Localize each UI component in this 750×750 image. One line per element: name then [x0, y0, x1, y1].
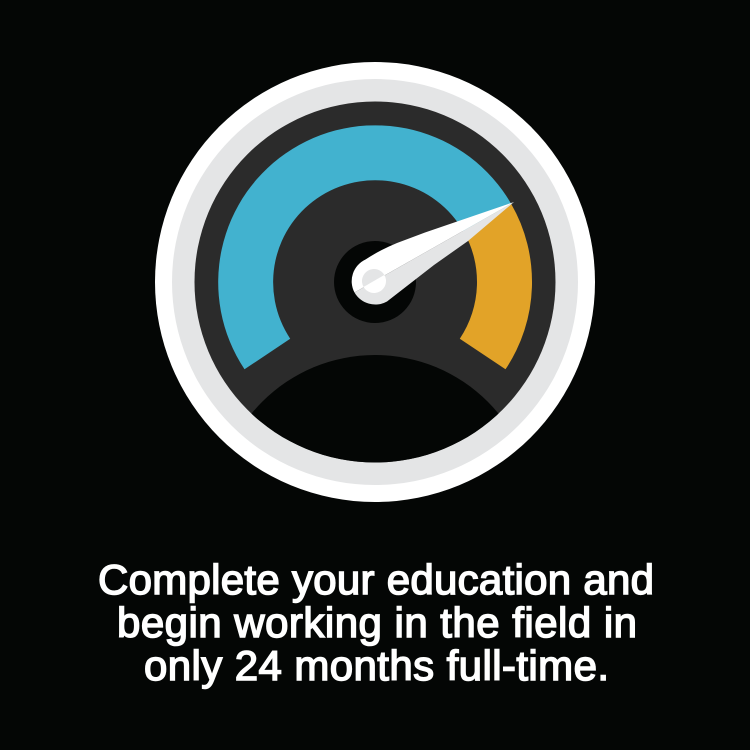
gauge needle: [352, 202, 514, 305]
black needle hub: [334, 241, 416, 323]
caption text: Complete your education and: [98, 556, 654, 603]
icon: speedometer gauge: [155, 62, 595, 502]
gauge outer white ring: [155, 62, 595, 502]
gauge dark face: [194, 102, 556, 462]
black lower display area: [252, 355, 498, 462]
gauge light gray ring: [172, 79, 578, 485]
caption text: begin working in the field in: [117, 599, 637, 646]
needle gray lower half: [354, 202, 514, 305]
needle white upper half: [352, 202, 514, 292]
caption text: only 24 months full-time.: [144, 642, 609, 689]
orange gauge arc: [460, 204, 532, 369]
blue gauge arc: [218, 125, 511, 369]
needle pivot circle: [362, 269, 386, 293]
caption text: [98, 556, 654, 689]
